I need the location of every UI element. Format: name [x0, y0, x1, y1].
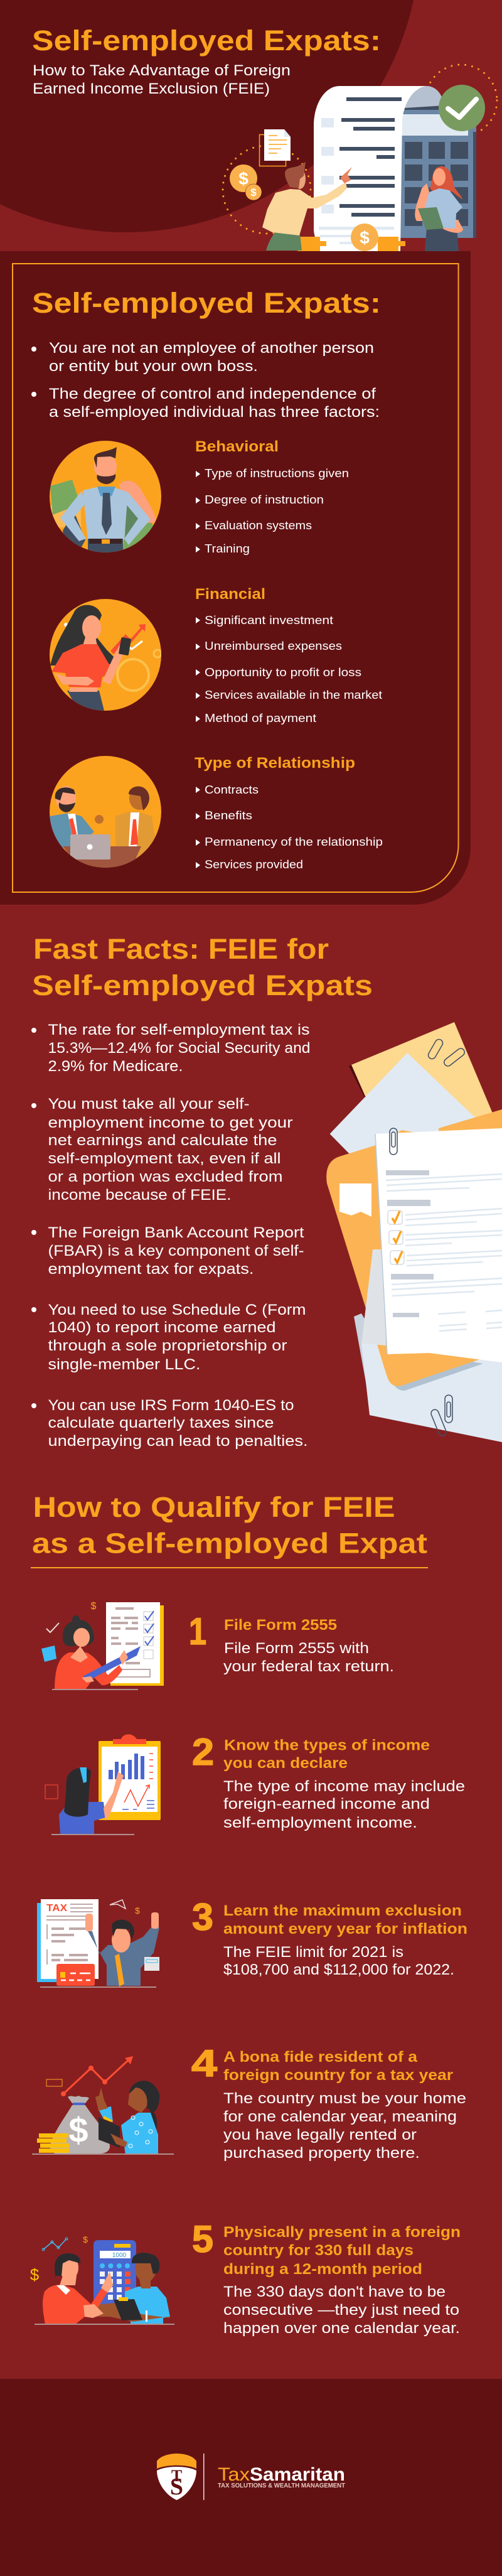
factor: financial: Services available in the market	[205, 688, 382, 701]
illustration: stacked documents and folder	[326, 1022, 502, 1442]
header illustration: receipt, building and two people	[223, 65, 497, 251]
factor: financial: Significant investment	[205, 613, 333, 627]
illustration: woman with money bag and rising arrow	[32, 2056, 174, 2155]
step 3 text: The FEIE limit for 2021 is	[223, 1944, 403, 1961]
factor: behavioral: Evaluation systems	[205, 519, 312, 532]
fact: form 1040-ES: calculate quarterly taxes since	[48, 1415, 274, 1431]
factor: behavioral: Behavioral	[195, 438, 279, 455]
step 2 text: foreign-earned income and	[223, 1796, 430, 1813]
step 2 text: self-employment income.	[223, 1814, 417, 1831]
step 4 text: A bona fide resident of a	[223, 2049, 418, 2066]
factor: financial: Unreimbursed expenses	[205, 639, 342, 652]
number 2: 2	[192, 1731, 214, 1773]
step 1 text	[223, 1617, 394, 1675]
factor: financial: Opportunity to profit or loss	[205, 666, 361, 679]
factor: type of relationship: Permanency of the relationship	[205, 835, 383, 848]
fast facts heading: Fast Facts: FEIE for	[33, 933, 329, 965]
section: fast facts	[31, 933, 502, 1450]
logo divider	[203, 2454, 205, 2500]
how to qualify heading	[32, 1491, 427, 1560]
header panel	[0, 0, 497, 251]
how to qualify heading: as a Self-employed Expat	[32, 1527, 427, 1560]
logo wordmark: Samaritan	[250, 2464, 345, 2485]
panel heading: Self-employed Expats:	[32, 287, 381, 319]
step 4 text: purchased property there.	[223, 2145, 420, 2162]
factor: type of relationship: Type of Relationship	[195, 755, 355, 772]
subtitle: How to Take Advantage of Foreign	[33, 62, 291, 79]
factor: type of relationship	[195, 755, 383, 871]
number 4: 4	[191, 2042, 218, 2084]
fact: FBAR	[31, 1224, 304, 1278]
illustration: man celebrating with tax form: $	[135, 1905, 140, 1916]
step 4 text: for one calendar year, meaning	[223, 2108, 457, 2125]
step 5 text: during a 12-month period	[223, 2261, 422, 2278]
illustration: two people shaking hands before calculator: $	[30, 2265, 40, 2284]
step 1 text: File Form 2555 with	[224, 1640, 369, 1657]
footer	[0, 2379, 502, 2576]
bullet: not an employee: You are not an employee of another person	[49, 340, 374, 357]
number 1: 1	[189, 1610, 206, 1652]
number 3: 3	[192, 1896, 213, 1938]
section: how to qualify	[30, 1491, 467, 2337]
logo wordmark	[218, 2464, 346, 2489]
fact: schedule C	[31, 1301, 306, 1373]
factor: financial	[195, 586, 382, 725]
title: Self-employed Expats:	[32, 24, 381, 57]
fact: form 1040-ES: You can use IRS Form 1040-ES to	[48, 1397, 294, 1414]
bullet: three factors: a self-employed individual has three factors:	[49, 404, 380, 421]
factor: financial: Financial	[195, 586, 265, 603]
step 2 text: The type of income may include	[223, 1778, 465, 1795]
header illustration: receipt, building and two people: $	[360, 228, 370, 247]
illustration: two people shaking hands before calculator: 1000	[112, 2252, 127, 2259]
fact: schedule C: single-member LLC.	[48, 1356, 201, 1373]
fact: tax rate: 2.9% for Medicare.	[48, 1058, 183, 1075]
fact: net earnings: income because of FEIE.	[48, 1187, 231, 1204]
subtitle	[33, 62, 291, 97]
step 4 text: you have legally rented or	[223, 2126, 417, 2143]
how to qualify heading: How to Qualify for FEIE	[33, 1491, 395, 1523]
logo wordmark: Tax	[218, 2464, 250, 2485]
illustration: two people shaking hands before calculator: $	[83, 2234, 88, 2245]
logo shield: S	[170, 2474, 183, 2500]
step 4 text: The country must be your home	[223, 2090, 466, 2107]
fact: schedule C: 1040) to report income earned	[48, 1319, 276, 1336]
step 5	[30, 2218, 461, 2337]
fact: schedule C: through a sole proprietorship or	[48, 1337, 287, 1354]
bullet: not an employee	[31, 340, 374, 375]
factor: type of relationship: Contracts	[205, 783, 259, 796]
bullet: three factors	[31, 385, 380, 421]
step 2 text: Know the types of income	[224, 1737, 430, 1754]
fact: net earnings: You must take all your self-	[48, 1096, 250, 1113]
fact: schedule C: You need to use Schedule C (Form	[48, 1301, 306, 1318]
factor: type of relationship: Services provided	[205, 858, 303, 871]
illustration: woman with pencil and checklist	[41, 1601, 164, 1690]
fast facts heading: Self-employed Expats	[32, 969, 373, 1001]
fact: net earnings: self-employment tax, even if all	[48, 1150, 281, 1167]
factor: financial: Method of payment	[205, 711, 316, 725]
step 3 text: Learn the maximum exclusion	[223, 1902, 462, 1919]
factor: behavioral	[195, 438, 349, 555]
fact: net earnings: employment income to get your	[48, 1114, 293, 1131]
illustration: woman pointing at chart	[45, 1734, 161, 1835]
logo shield	[157, 2454, 196, 2500]
step 4 text	[223, 2049, 466, 2162]
footer background	[0, 2379, 502, 2576]
header illustration: receipt, building and two people: $	[238, 169, 248, 188]
fact: FBAR: employment tax for expats.	[48, 1261, 254, 1278]
icon: two colleagues with laptop circle	[50, 756, 161, 868]
factor: type of relationship: Benefits	[205, 809, 252, 822]
step 5 text: consecutive —they just need to	[223, 2302, 459, 2319]
illustration: woman with pencil and checklist: $	[91, 1601, 97, 1612]
step 5 text: happen over one calendar year.	[223, 2320, 460, 2337]
step 5 text: The 330 days don't have to be	[223, 2283, 446, 2300]
factor: behavioral: Degree of instruction	[205, 493, 324, 506]
panel: self-employed expats	[0, 251, 471, 905]
step 5 text: country for 330 full days	[223, 2242, 414, 2259]
fact: tax rate: The rate for self-employment tax is	[48, 1021, 310, 1038]
step 4 text: foreign country for a tax year	[223, 2067, 453, 2084]
bullet: not an employee: or entity but your own boss.	[49, 358, 258, 375]
factor: behavioral: Training	[205, 542, 250, 555]
fact: net earnings: or a portion was excluded from	[48, 1168, 283, 1185]
icon: woman with phone circle	[50, 599, 161, 711]
logo shield: T	[171, 2467, 182, 2485]
step 3 text: $108,700 and $112,000 for 2022.	[223, 1961, 454, 1978]
panel background	[0, 251, 471, 905]
step 3 text: amount every year for inflation	[223, 1921, 467, 1937]
step 3 text	[223, 1902, 467, 1978]
step 1 text: your federal tax return.	[223, 1658, 394, 1675]
header illustration: receipt, building and two people: $	[250, 186, 257, 198]
illustration: man celebrating with tax form: TAX	[46, 1903, 67, 1914]
step 4	[32, 2042, 466, 2162]
illustration: two people shaking hands before calculator	[30, 2234, 174, 2325]
step 3	[37, 1896, 467, 1988]
step 1 text: File Form 2555	[224, 1617, 337, 1634]
number 5: 5	[192, 2218, 213, 2260]
step 1	[41, 1601, 394, 1690]
illustration: man celebrating with tax form	[37, 1899, 159, 1988]
fast facts heading	[32, 933, 373, 1001]
fact: FBAR: (FBAR) is a key component of self-	[48, 1242, 304, 1259]
step 5 text: Physically present in a foreign	[223, 2224, 461, 2241]
step 2 text: you can declare	[223, 1755, 348, 1772]
fact: tax rate: 15.3%—12.4% for Social Security and	[48, 1040, 310, 1057]
fact: tax rate	[31, 1021, 310, 1075]
step 5 text	[223, 2224, 461, 2337]
factor: behavioral: Type of instructions given	[205, 466, 349, 480]
illustration: woman with money bag and rising arrow: $	[68, 2110, 88, 2150]
icon: businessman circle	[50, 441, 161, 552]
fact: net earnings	[31, 1096, 293, 1204]
subtitle: Earned Income Exclusion (FEIE)	[33, 80, 270, 97]
fact: form 1040-ES: underpaying can lead to penalties.	[48, 1433, 307, 1450]
bullet: three factors: The degree of control and independence of	[49, 385, 376, 402]
fact: net earnings: net earnings and calculate the	[48, 1132, 277, 1149]
panel border	[13, 264, 458, 892]
step 2 text	[223, 1737, 465, 1831]
step 2	[45, 1731, 465, 1835]
logo wordmark: TAX SOLUTIONS & WEALTH MANAGEMENT	[218, 2482, 346, 2489]
fact: FBAR: The Foreign Bank Account Report	[48, 1224, 304, 1241]
header dark blob	[0, 0, 420, 232]
fact: form 1040-ES	[31, 1397, 307, 1450]
